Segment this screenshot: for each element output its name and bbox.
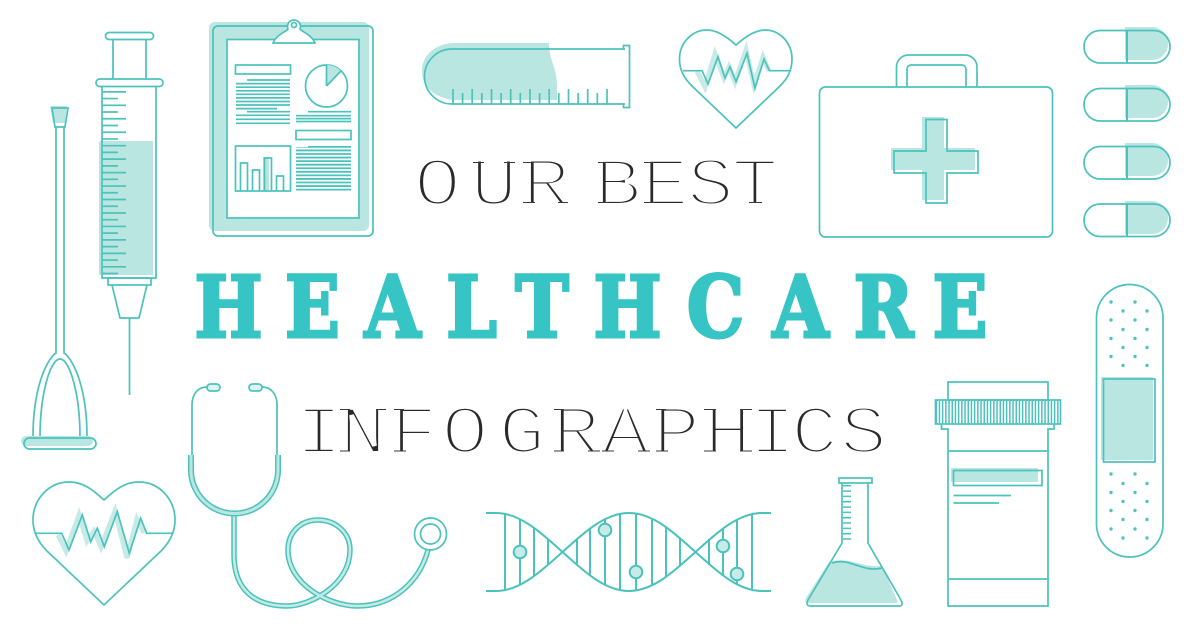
icon: first aid case	[820, 55, 1052, 237]
icon: capsules	[1084, 27, 1170, 236]
capsule 4	[1084, 201, 1170, 236]
icon: heart with pulse, bottom	[33, 482, 175, 605]
pie chart	[306, 65, 348, 107]
icon: heart with pulse, top	[680, 30, 792, 128]
heading: infographics: INFOGRAPHICS	[295, 396, 887, 474]
icon: small syringe plunger	[21, 106, 96, 449]
heading: our best: OUR BEST	[414, 148, 779, 226]
capsule 3	[1084, 143, 1170, 179]
capsule 1	[1084, 27, 1170, 63]
icon: syringe	[96, 32, 163, 395]
icon: bandage	[1096, 284, 1163, 557]
DNA nodes	[514, 524, 744, 580]
icon: test tube	[422, 43, 630, 108]
icon: DNA helix	[486, 513, 771, 591]
capsule 2	[1084, 85, 1170, 121]
heading: healthcare: HEALTHCARE	[194, 257, 988, 357]
chest piece	[414, 518, 446, 550]
earpieces and ear tubes	[192, 384, 277, 455]
clipboard clip	[273, 20, 315, 43]
icon: stethoscope	[191, 384, 446, 606]
bar chart	[236, 146, 290, 191]
icon: pill bottle	[936, 382, 1060, 606]
tube	[191, 455, 428, 606]
icon: clipboard with report	[209, 20, 373, 236]
icon: flask	[805, 478, 902, 606]
